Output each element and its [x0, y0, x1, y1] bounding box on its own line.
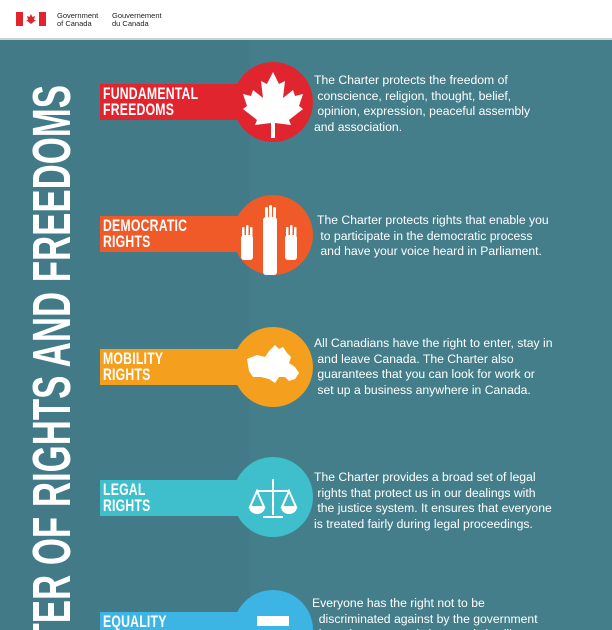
text: conscience, religion, thought, belief, — [317, 89, 511, 103]
row: equality rights — [100, 590, 549, 630]
header: Gouvernement — [112, 11, 162, 20]
header text — [57, 11, 98, 28]
text: set up a business anywhere in Canada. — [317, 383, 531, 397]
text: the justice system. It ensures that everyone — [317, 501, 552, 515]
row: mobility rights — [100, 327, 552, 407]
text: The Charter protects rights that enable you — [317, 213, 549, 227]
row: legal rights — [100, 457, 552, 537]
text: rights that protect us in our dealings with — [317, 486, 536, 500]
label — [103, 480, 151, 515]
text: guarantees that you can look for work or — [317, 367, 535, 381]
label: FUNDAMENTAL — [103, 84, 198, 103]
text — [314, 73, 530, 134]
text: The Charter provides a broad set of legal — [314, 470, 536, 484]
label: RIGHTS — [103, 365, 151, 384]
icon: hands — [233, 195, 313, 275]
text: The Charter protects the freedom of — [314, 73, 508, 87]
label: RIGHTS — [103, 496, 151, 515]
label: RIGHTS — [103, 232, 151, 251]
text: Everyone has the right not to be — [312, 596, 485, 610]
header: du Canada — [112, 19, 149, 28]
text: discriminated against by the government — [319, 612, 538, 626]
text: to participate in the democratic process — [320, 229, 532, 243]
icon: canada map — [233, 327, 313, 407]
text — [317, 213, 549, 258]
label — [103, 84, 198, 119]
row: fundamental freedoms — [100, 62, 530, 142]
header text: of Canada — [57, 19, 92, 28]
text: is treated fairly during legal proceedings. — [314, 517, 533, 531]
row: democratic rights — [100, 195, 549, 275]
text: and leave Canada. The Charter also — [317, 352, 514, 366]
label: MOBILITY — [103, 349, 163, 368]
icon: maple leaf — [233, 62, 313, 142]
header — [0, 0, 612, 40]
label — [103, 349, 163, 384]
icon: equals — [233, 590, 313, 630]
text: and association. — [314, 120, 402, 134]
text: All Canadians have the right to enter, stay in — [314, 336, 552, 350]
label: FREEDOMS — [103, 100, 174, 119]
label: DEMOCRATIC — [103, 216, 187, 235]
text — [314, 336, 552, 397]
icon: scales — [233, 457, 313, 537]
text — [314, 470, 552, 531]
text — [312, 596, 549, 630]
header text: Government — [57, 11, 98, 20]
icon: canada flag — [16, 12, 46, 26]
label: LEGAL — [103, 480, 146, 499]
text: opinion, expression, peaceful assembly — [317, 104, 530, 118]
label — [103, 216, 187, 251]
text: and have your voice heard in Parliament. — [320, 244, 542, 258]
